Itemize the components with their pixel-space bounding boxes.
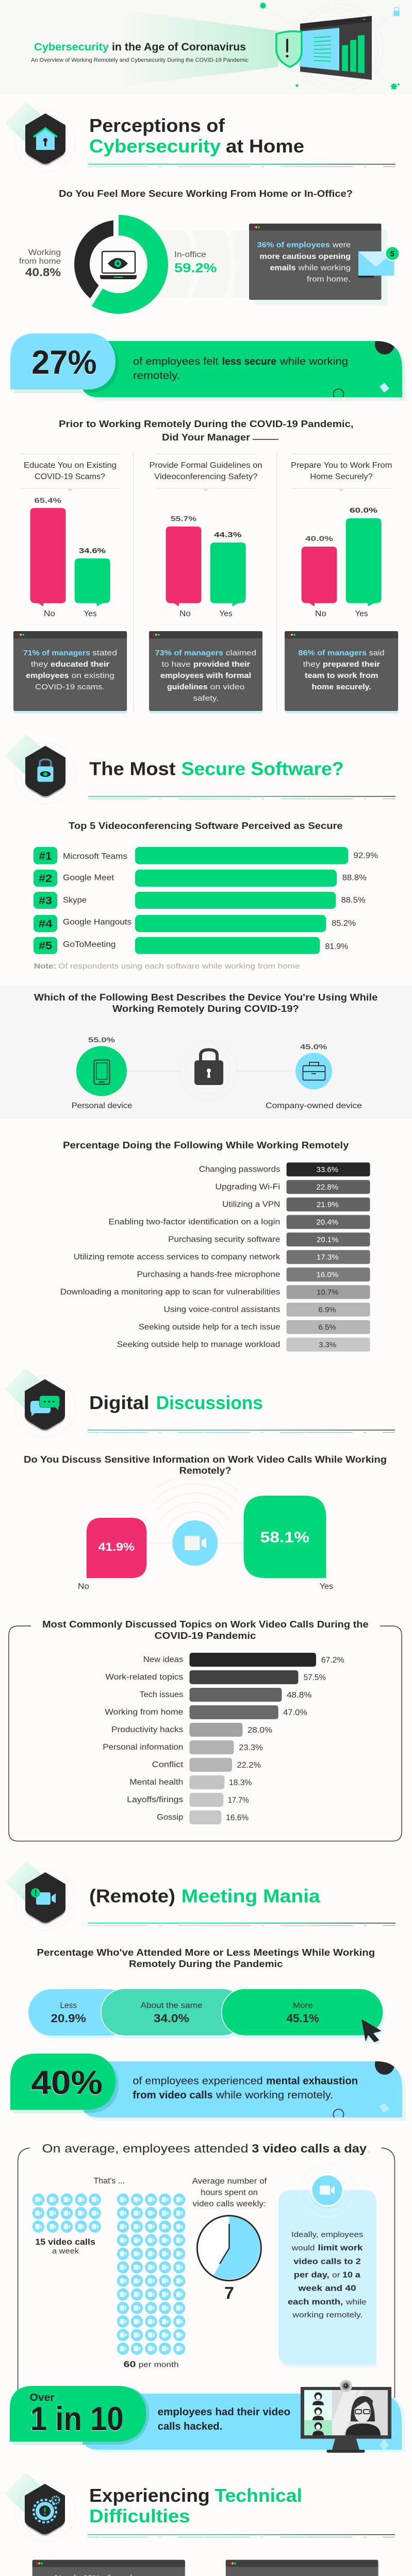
panel: average video calls: 15 video calls xyxy=(35,2237,95,2247)
question heading: prior to remote: Prior to Working Remotely During the COVID-19 Pandemic, xyxy=(59,418,354,429)
icon: virus bottom xyxy=(390,83,399,90)
hero banner xyxy=(0,0,412,94)
donut label: from home: Working xyxy=(28,248,61,257)
section heading: digital discussions: Digital xyxy=(89,1392,150,1413)
bar chart: topics: 18.3% xyxy=(229,1778,252,1787)
callout: 86% managers: home securely. xyxy=(311,683,371,691)
ranking chart: software: Google Meet xyxy=(63,874,114,883)
callout: 73% managers: 73% of managers xyxy=(155,649,223,657)
bar chart: topics: 48.8% xyxy=(287,1691,312,1700)
subtitle: An Overview of Working Remotely and Cybersecurity During the COVID-19 Pandemic xyxy=(31,57,249,63)
stat band: 40% exhaustion: mental exhaustion xyxy=(266,2076,358,2087)
ranking chart: software xyxy=(34,847,378,954)
panel: ideal calls: 10 a xyxy=(342,2271,360,2280)
callout: 86% managers: said xyxy=(369,649,385,657)
callout: 86% managers xyxy=(285,631,399,714)
bar chart: remote actions: Downloading a monitoring app to scan for vulnerabilities xyxy=(60,1288,281,1297)
action chart heading: Percentage Doing the Following While Working Remotely xyxy=(63,1140,349,1150)
chart: sensitive information: Yes xyxy=(320,1582,333,1591)
question heading: prior to remote xyxy=(59,418,354,443)
panel: device type: Personal device xyxy=(72,1101,132,1110)
stat band: 27% less secure: of employees felt xyxy=(133,356,219,367)
stat band: 1 in 10 hacked: 1 in 10 xyxy=(30,2400,124,2438)
ranking chart: software: 81.9% xyxy=(325,942,348,951)
panel: educate: 65.4% xyxy=(34,496,62,504)
bar chart: topics: Productivity hacks xyxy=(111,1725,184,1734)
bar chart: topics: Layoffs/firings xyxy=(127,1795,184,1804)
panel: device type: Which of the Following Best Describes the Device You're Using While xyxy=(34,992,377,1003)
panel: ideal calls: working remotely. xyxy=(292,2311,362,2319)
stat band: 1 in 10 hacked: calls hacked. xyxy=(158,2421,222,2432)
ranking chart: software: Skype xyxy=(63,896,87,905)
ranking chart: software: #5 xyxy=(39,940,52,952)
section icon: gear xyxy=(5,2472,75,2542)
question heading: Do You Feel More Secure Working From Home or In-Office? xyxy=(59,188,353,199)
bar chart: remote actions: Purchasing security software xyxy=(168,1235,280,1244)
stat band: 27% less secure: less secure xyxy=(222,356,276,367)
donut label: in-office xyxy=(174,250,217,275)
section heading: perceptions: at Home xyxy=(226,135,304,157)
ranking chart: software: #2 xyxy=(39,873,52,885)
panel: average video calls: On average, employees attended xyxy=(42,2142,249,2155)
ranking chart: software: GoToMeeting xyxy=(63,940,116,949)
panel: average video calls: That's ... xyxy=(94,2177,125,2185)
section heading: technical difficulties: Technical xyxy=(215,2485,302,2506)
bar chart: topics: 47.0% xyxy=(283,1708,307,1717)
panel: educate: COVID-19 Scams? xyxy=(35,472,105,481)
chart: meeting pills: Less xyxy=(60,2001,77,2010)
callout: 86% managers: 86% of managers xyxy=(298,649,367,657)
panel: device type: Working Remotely During COVID-19? xyxy=(112,1003,299,1014)
bar chart: remote actions: Utilizing remote access services to company network xyxy=(74,1253,281,1262)
section heading: secure software: The Most xyxy=(89,758,176,779)
bar chart: topics: 28.0% xyxy=(248,1726,272,1735)
bar chart: topics: Working from home xyxy=(105,1708,183,1717)
bar chart: remote actions: Seeking outside help to manage workload xyxy=(117,1341,280,1349)
panel: discussed topics xyxy=(9,1619,402,1841)
question heading: sensitive information: Remotely? xyxy=(179,1465,232,1476)
callout: 73% managers: provided their xyxy=(193,660,250,669)
ranking chart: software: Microsoft Teams xyxy=(63,852,127,861)
icon: envelope xyxy=(358,246,400,278)
panel: device type: 55.0% xyxy=(88,1036,116,1044)
panel: formal guidelines: Videoconferencing Safety? xyxy=(154,472,258,481)
bar chart: remote actions: 17.3% xyxy=(317,1253,339,1262)
ranking heading: Top 5 Videoconferencing Software Perceived as Secure xyxy=(69,820,343,831)
panel: ideal calls xyxy=(278,2163,376,2367)
panel: educate: Yes xyxy=(84,609,97,618)
chart: sensitive information: No xyxy=(78,1582,89,1591)
section heading: perceptions: Cybersecurity xyxy=(89,135,221,157)
callout: 73% managers: claimed xyxy=(226,649,256,657)
chart: sensitive information: 41.9% xyxy=(98,1540,135,1553)
note: Note: xyxy=(34,962,56,971)
ranking chart: software: Google Hangouts xyxy=(63,918,131,927)
panel: average video calls: 60 xyxy=(124,2360,136,2369)
question heading: prior to remote: Did Your Manager xyxy=(162,432,250,443)
bar chart: topics: 23.3% xyxy=(239,1743,263,1752)
icon: cursor xyxy=(361,2019,383,2045)
callout: 71% managers: they xyxy=(31,660,48,669)
panel: average video calls: a week xyxy=(52,2247,79,2256)
donut chart xyxy=(74,215,168,314)
panel: prepare: Yes xyxy=(355,609,368,618)
callout: 36% cautious: were xyxy=(332,241,351,249)
panel: educate: No xyxy=(44,609,55,618)
bar chart: topics: 57.5% xyxy=(304,1673,326,1682)
callout: 71% managers xyxy=(13,631,127,714)
bar chart: topics: Mental health xyxy=(129,1778,183,1787)
icon: virus top xyxy=(259,2,267,9)
callout: 63% work through issues xyxy=(226,2560,379,2576)
bar chart: topics: 67.2% xyxy=(321,1656,344,1665)
panel: formal guidelines: Provide Formal Guidelines on xyxy=(150,461,262,470)
ranking chart: software: #1 xyxy=(39,850,52,862)
callout: 71% managers: on existing xyxy=(72,671,114,680)
panel: ideal calls: while xyxy=(345,2298,366,2307)
panel: ideal calls: or xyxy=(332,2271,340,2280)
stat band: 40% exhaustion: while working remotely. xyxy=(216,2090,333,2101)
section heading: meeting mania: Meeting Mania xyxy=(182,1886,321,1906)
callout: 73% managers: to have xyxy=(162,660,191,669)
callout: 71% managers: stated xyxy=(92,649,117,657)
callout: 71% managers: educated their xyxy=(51,660,109,669)
panel: educate xyxy=(13,453,127,714)
hero illustration: browser with shield xyxy=(276,16,372,80)
panel: device type: 45.0% xyxy=(300,1042,327,1050)
panel: average video calls: . xyxy=(368,2147,369,2154)
callout: 73% managers: on video xyxy=(210,683,244,691)
callout: 73% managers: safety. xyxy=(193,694,219,703)
bar chart: remote actions: Upgrading Wi-Fi xyxy=(215,1183,280,1192)
stat band: 27% less secure xyxy=(10,333,406,401)
panel: average video calls: per month xyxy=(139,2361,179,2369)
icon: envelope: 5 xyxy=(390,249,394,259)
callout: 86% managers: prepared their xyxy=(323,660,380,669)
section heading: perceptions xyxy=(88,115,395,167)
stat band: 1 in 10 hacked: employees had their video xyxy=(158,2406,290,2418)
callout: 71% managers: 71% of managers xyxy=(23,649,90,657)
chart: meeting pills: 45.1% xyxy=(287,2012,319,2025)
stat band: 27% less secure: while working xyxy=(279,356,348,367)
panel: ideal calls: each month, xyxy=(288,2298,343,2307)
stat band: 1 in 10 hacked xyxy=(10,2380,405,2453)
stat band: 40% exhaustion: 40% xyxy=(31,2064,103,2102)
clock chart: hours on video calls: hours spent on xyxy=(201,2189,258,2197)
title xyxy=(34,41,246,53)
panel: formal guidelines: 55.7% xyxy=(171,514,197,522)
bar chart: topics: 22.2% xyxy=(237,1761,261,1770)
question heading: sensitive information: Do You Discuss Sensitive Information on Work Video Calls While Working xyxy=(24,1454,387,1465)
callout: 36% cautious: more cautious opening xyxy=(260,252,351,261)
ranking chart: software: 85.2% xyxy=(332,919,356,928)
panel: formal guidelines: No xyxy=(179,609,191,618)
panel: prepare: 60.0% xyxy=(350,506,378,514)
donut label: from home: from home xyxy=(19,257,61,266)
ranking chart: software: #4 xyxy=(38,918,53,930)
section heading: secure software: Secure Software? xyxy=(182,758,344,779)
callout: 36% cautious: 36% of employees xyxy=(257,241,330,249)
bar chart: remote actions: Seeking outside help for a tech issue xyxy=(139,1323,280,1332)
stat band: 40% exhaustion: of employees experienced xyxy=(133,2076,263,2087)
panel: prepare: No xyxy=(315,609,326,618)
panel: prepare xyxy=(285,453,399,714)
title: Cybersecurity xyxy=(34,41,109,53)
ranking chart: software: 92.9% xyxy=(354,851,378,860)
donut label: from home: 40.8% xyxy=(25,266,61,279)
chart: meeting pills xyxy=(28,1989,385,2045)
section heading: digital discussions: Discussions xyxy=(156,1392,263,1413)
icon: phone xyxy=(94,1060,109,1084)
icon grid: 15 calls a week xyxy=(32,2193,101,2233)
bar chart: topics: 16.6% xyxy=(226,1814,249,1822)
panel: discussed topics: COVID-19 Pandemic xyxy=(155,1630,256,1641)
stat band: 27% less secure: remotely. xyxy=(133,370,180,381)
bar chart: remote actions: 10.7% xyxy=(317,1288,339,1297)
stat band: 27% less secure: 27% xyxy=(31,344,97,381)
bar chart: topics: Conflict xyxy=(152,1760,184,1769)
bar chart: remote actions: Changing passwords xyxy=(199,1165,281,1174)
bar chart: remote actions: Utilizing a VPN xyxy=(222,1200,280,1209)
panel: average video calls xyxy=(18,2142,394,2403)
bar chart: topics: Personal information xyxy=(103,1743,183,1752)
panel: prepare: 40.0% xyxy=(305,534,334,543)
bar chart: remote actions: 22.8% xyxy=(317,1183,338,1192)
bar chart: remote actions: 6.5% xyxy=(319,1323,336,1332)
callout: 36% cautious xyxy=(249,224,400,305)
callout: 36% cautious: emails xyxy=(270,264,296,273)
panel: educate: 34.6% xyxy=(79,547,106,555)
callout: 36% cautious: from home. xyxy=(307,275,351,283)
donut label: from home xyxy=(19,248,61,279)
icon: padlock xyxy=(179,1041,238,1101)
bar chart: remote actions: 20.1% xyxy=(317,1235,339,1244)
question heading: meetings xyxy=(37,1947,375,1969)
icon: briefcase xyxy=(303,1062,325,1080)
section icon: camera alert xyxy=(5,1861,76,1930)
panel: device type xyxy=(0,985,412,1119)
bar chart: topics: Work-related topics xyxy=(105,1673,184,1682)
column dividers xyxy=(133,452,277,711)
bar chart: topics: Gossip xyxy=(157,1813,183,1822)
clock chart: hours on video calls xyxy=(192,2177,267,2302)
panel: discussed topics: Most Commonly Discussed Topics on Work Video Calls During the xyxy=(42,1619,369,1630)
section heading: secure software xyxy=(88,758,395,799)
question heading: meetings: Percentage Who've Attended More or Less Meetings While Working xyxy=(37,1947,375,1958)
panel: average video calls: 3 video calls a day xyxy=(252,2142,367,2155)
section heading: perceptions: Perceptions of xyxy=(89,115,225,136)
panel: device type: Company-owned device xyxy=(266,1101,362,1110)
bar chart: topics: 17.7% xyxy=(228,1796,249,1805)
callout: 71% managers: employees xyxy=(26,671,69,680)
icon grid: 60 calls per month xyxy=(117,2193,185,2355)
callout: 71% managers: COVID-19 scams. xyxy=(35,683,105,691)
ranking chart: software: 88.5% xyxy=(341,896,366,905)
stat band: 1 in 10 hacked: 1 in 10 xyxy=(30,2400,124,2437)
stat band: 27% less secure: 27% xyxy=(31,344,97,382)
chart: meeting pills: 34.0% xyxy=(154,2012,189,2025)
panel: ideal calls: week and 40 xyxy=(298,2284,356,2293)
panel: video call issues xyxy=(9,2560,402,2576)
title: in the Age of Coronavirus xyxy=(112,41,246,53)
section icon: home xyxy=(5,102,76,172)
panel: ideal calls: Ideally, employees xyxy=(291,2230,363,2239)
chart: sensitive information: 58.1% xyxy=(260,1530,309,1546)
note: Of respondents using each software while working from home xyxy=(58,962,300,971)
bar chart: remote actions: 16.0% xyxy=(317,1270,338,1279)
section heading: meeting mania xyxy=(88,1886,395,1926)
bar chart: remote actions: Purchasing a hands-free microphone xyxy=(137,1270,280,1279)
clock chart: hours on video calls: 7 xyxy=(224,2283,234,2302)
icon: dot xyxy=(295,84,299,87)
panel: ideal calls: per day, xyxy=(294,2271,329,2280)
ranking chart: software: #3 xyxy=(39,895,52,907)
stat band: 40% exhaustion xyxy=(10,2054,406,2121)
stat band: 40% exhaustion: 40% xyxy=(30,2064,103,2102)
chart: meeting pills: About the same xyxy=(141,2001,202,2010)
panel: educate: Educate You on Existing xyxy=(24,461,117,470)
donut background stripes xyxy=(4,150,250,379)
bar chart: remote actions: 3.3% xyxy=(319,1341,336,1349)
panel: ideal calls: video calls to 2 xyxy=(293,2257,361,2266)
panel: formal guidelines xyxy=(149,453,263,714)
ranking chart: software: 88.8% xyxy=(342,874,367,883)
chart: meeting pills: 20.9% xyxy=(51,2012,86,2025)
bar chart: remote actions: 33.6% xyxy=(317,1165,338,1174)
chart: meeting pills: More xyxy=(293,2001,312,2010)
panel: ideal calls: limit work xyxy=(318,2244,363,2252)
section heading: digital discussions xyxy=(88,1392,395,1433)
panel: prepare: Home Securely? xyxy=(310,472,373,481)
bar chart: topics: New ideas xyxy=(143,1655,184,1664)
bar chart: remote actions: Enabling two-factor identification on a login xyxy=(108,1218,280,1227)
panel: ideal calls: would xyxy=(291,2244,315,2252)
bar chart: topics: Tech issues xyxy=(140,1690,184,1699)
icon: lock xyxy=(393,7,400,16)
bar chart: remote actions: 20.4% xyxy=(317,1218,338,1227)
donut label: in-office: In-office xyxy=(174,250,206,259)
callout: 68% experienced issue xyxy=(32,2560,186,2576)
chart: sensitive information xyxy=(78,1476,333,1591)
section heading: technical difficulties xyxy=(88,2485,395,2537)
callout: 73% managers: employees with formal xyxy=(160,671,251,680)
bar chart: topics xyxy=(103,1653,344,1824)
callout: 36% cautious: while working xyxy=(298,264,351,273)
callout: 86% managers: they xyxy=(303,660,320,669)
stat band: 1 in 10 hacked: Over xyxy=(30,2392,55,2403)
bar chart: remote actions: 21.9% xyxy=(317,1200,339,1209)
clock chart: hours on video calls: video calls weekly: xyxy=(193,2200,266,2208)
panel: prepare: Prepare You to Work From xyxy=(291,461,392,470)
section icon: chat xyxy=(5,1368,75,1437)
bar chart: remote actions: Using voice-control assistants xyxy=(164,1306,281,1314)
callout: 73% managers: guidelines xyxy=(167,683,208,691)
bar chart: remote actions xyxy=(60,1162,370,1351)
stat band: 40% exhaustion: from video calls xyxy=(133,2090,213,2101)
icon: laptop with eye xyxy=(100,251,137,279)
donut label: in-office: 59.2% xyxy=(174,261,217,275)
section heading: technical difficulties: Difficulties xyxy=(89,2505,190,2527)
question heading: sensitive information xyxy=(24,1454,387,1476)
section heading: technical difficulties: Experiencing xyxy=(89,2485,210,2506)
icon: monitor with video call xyxy=(301,2380,391,2453)
clock chart: hours on video calls: Average number of xyxy=(192,2177,267,2186)
section heading: meeting mania: (Remote) xyxy=(89,1886,175,1906)
panel: formal guidelines: Yes xyxy=(220,609,233,618)
bar chart: remote actions: 6.9% xyxy=(319,1306,336,1314)
section icon: lock with eye xyxy=(5,735,76,804)
callout: 86% managers: team to work from xyxy=(305,671,378,680)
callout: 73% managers xyxy=(149,631,263,714)
panel: formal guidelines: 44.3% xyxy=(214,531,242,539)
question heading: meetings: Remotely During the Pandemic xyxy=(129,1958,283,1969)
